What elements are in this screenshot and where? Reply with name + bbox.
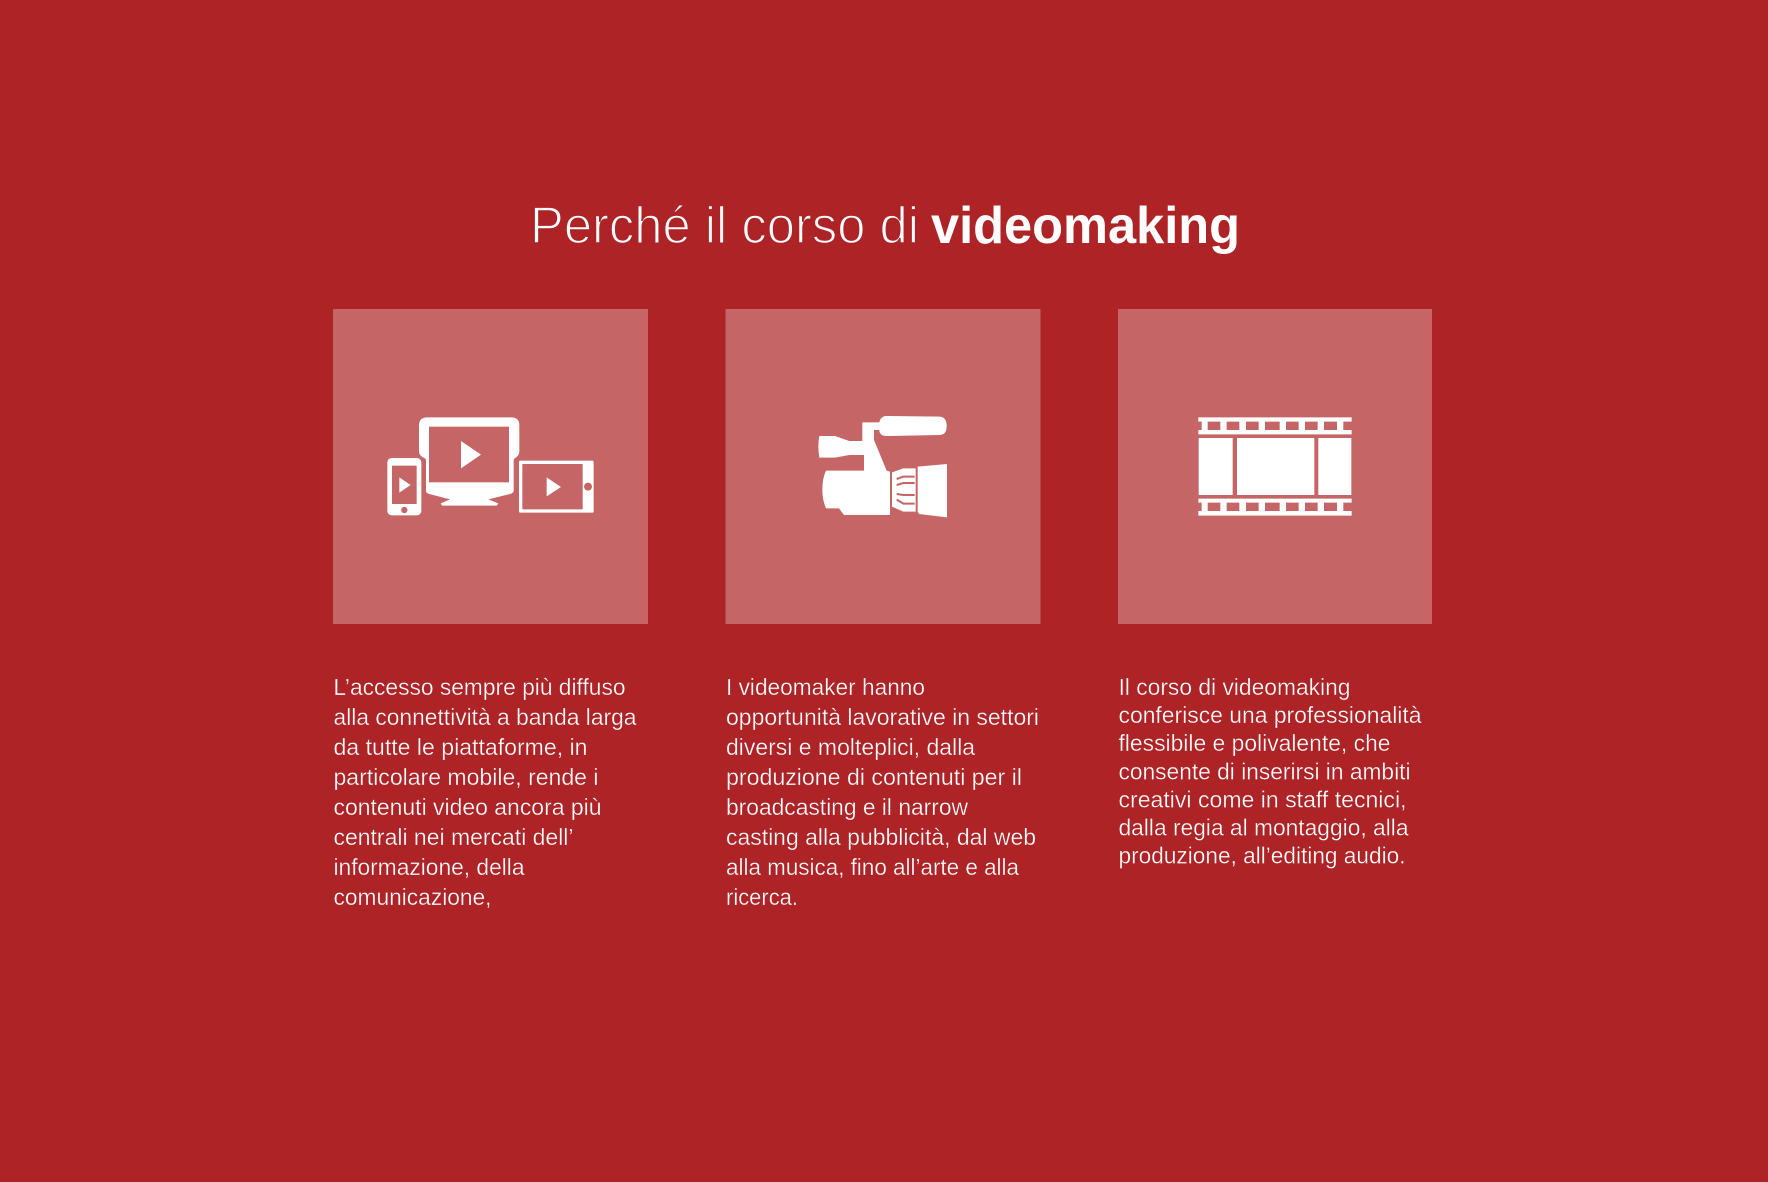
text block: devices: centrali nei mercati dell’ (334, 824, 574, 850)
text block: devices: L’accesso sempre più diffuso (334, 674, 626, 700)
text block: course: creativi come in staff tecnici, (1118, 786, 1406, 812)
icon: monitor, phone and tablet with play buttons (387, 417, 594, 515)
text block: video makers: ricerca. (726, 884, 798, 910)
text block: course: dalla regia al montaggio, alla (1118, 815, 1409, 841)
panel: video camera (726, 309, 1040, 624)
text block: video makers: casting alla pubblicità, dal web (726, 824, 1036, 850)
text block: course: produzione, all’editing audio. (1118, 843, 1406, 869)
text block: video makers (726, 674, 1039, 910)
text block: course: flessibile e polivalente, che (1118, 730, 1390, 756)
title: Perché il corso di (530, 197, 919, 255)
text block: course: conferisce una professionalità (1118, 702, 1422, 728)
text block: devices: particolare mobile, rende i (334, 764, 598, 790)
text block: course: Il corso di videomaking (1118, 674, 1350, 700)
text block: devices: informazione, della (334, 854, 525, 880)
text block: course: consente di inserirsi in ambiti (1118, 758, 1410, 784)
text block: devices: alla connettività a banda larga (334, 704, 637, 730)
text block: video makers: I videomaker hanno (726, 674, 925, 700)
text block: video makers: diversi e molteplici, dalla (726, 734, 975, 760)
icon: film strip (1198, 417, 1352, 516)
text block: devices: contenuti video ancora più (334, 794, 602, 820)
icon: video camera (818, 416, 947, 517)
text block: devices: comunicazione, (334, 884, 492, 910)
text block: video makers: opportunità lavorative in settori (726, 704, 1039, 730)
text block: video makers: alla musica, fino all’arte e alla (726, 854, 1019, 880)
title (530, 197, 1240, 255)
title: videomaking (931, 197, 1240, 255)
text block: course (1118, 674, 1422, 869)
text block: video makers: broadcasting e il narrow (726, 794, 968, 820)
text block: video makers: produzione di contenuti per il (726, 764, 1022, 790)
panel: devices (333, 309, 648, 624)
text block: devices (334, 674, 637, 910)
text block: devices: da tutte le piattaforme, in (334, 734, 588, 760)
panel: film strip (1118, 309, 1432, 624)
